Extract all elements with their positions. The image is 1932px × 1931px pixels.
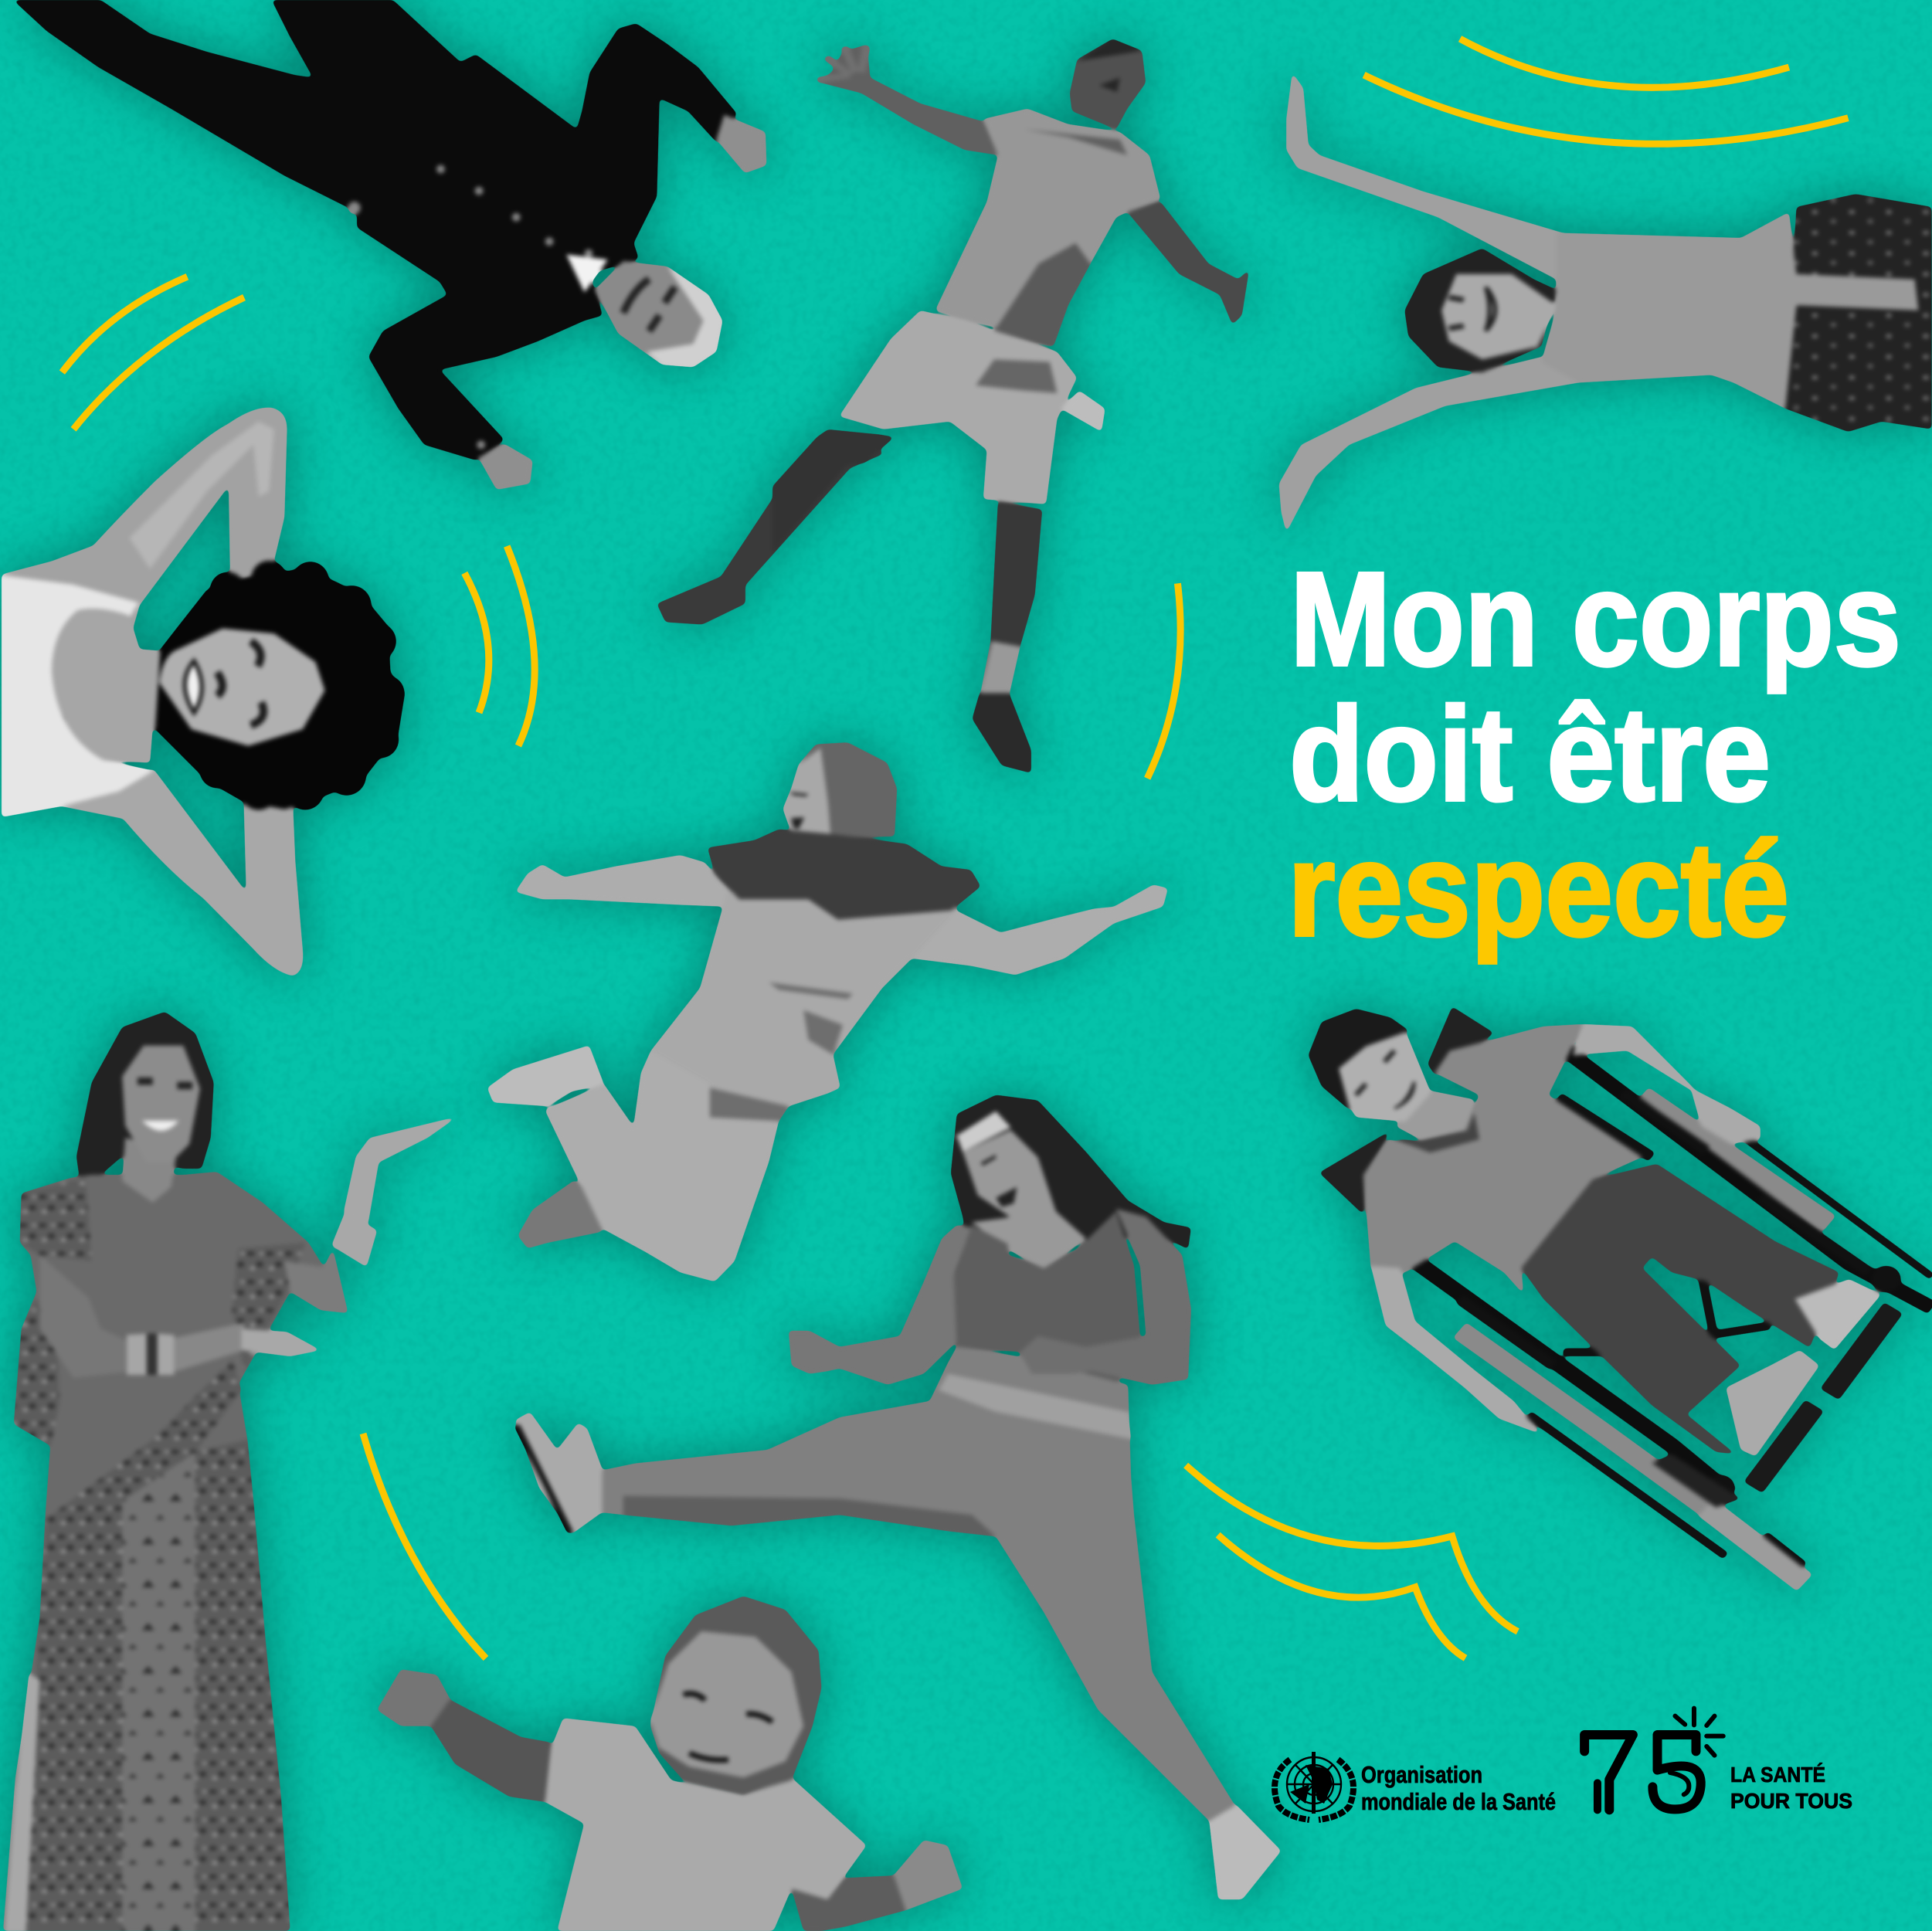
head — [1326, 1031, 1431, 1122]
shorts — [839, 311, 1077, 504]
lower left leg and shoe — [657, 431, 885, 625]
head — [650, 1596, 822, 1794]
hair — [951, 1095, 1191, 1249]
face — [963, 1130, 1056, 1227]
left arm and fist — [789, 1225, 972, 1385]
face features — [1356, 1050, 1394, 1095]
title line 3: respecté — [1288, 814, 1789, 964]
tube handles — [1379, 1026, 1901, 1500]
upper arm — [1286, 73, 1571, 280]
person: girl with polka-dot skirt — [1279, 73, 1932, 533]
headband — [957, 1111, 1011, 1152]
continents — [1290, 1765, 1333, 1804]
face features — [138, 1081, 192, 1085]
raised left arm — [817, 45, 998, 155]
hanging sleeve — [14, 1298, 59, 1446]
upper arm — [2, 407, 287, 672]
right shoe — [1209, 1805, 1282, 1899]
back foot — [518, 1180, 602, 1248]
other arm and hand — [792, 1875, 905, 1931]
undercarriage — [1563, 1272, 1771, 1352]
logo text: WHO name: Organisation — [1361, 1761, 1482, 1788]
logo text: WHO name — [1361, 1761, 1556, 1815]
person: woman in hijab jumping — [487, 742, 1168, 1281]
tunic — [650, 892, 956, 1121]
eyes and mouth — [684, 1694, 772, 1760]
arm highlight — [129, 422, 274, 569]
left shoe — [515, 1412, 603, 1534]
left forearm — [39, 1255, 128, 1378]
person: woman in sari — [3, 1012, 458, 1931]
logo: WHO emblem — [1275, 1752, 1353, 1820]
hair — [76, 1012, 214, 1178]
hijab — [799, 742, 897, 837]
right arm — [1573, 1024, 1761, 1144]
hair — [1404, 248, 1556, 372]
globe — [1287, 1757, 1341, 1811]
title — [1288, 544, 1901, 964]
thigh — [772, 429, 895, 553]
neck and face — [122, 1138, 177, 1203]
sari right panel — [195, 1440, 290, 1931]
leggings — [596, 1347, 1236, 1821]
right arm — [912, 884, 1168, 975]
skirt — [1785, 194, 1932, 432]
fist top — [716, 115, 766, 173]
trousers — [1521, 1164, 1839, 1454]
shirt shadow — [994, 243, 1091, 347]
right sleeve pattern — [233, 1243, 305, 1372]
sari central panel — [122, 1452, 195, 1931]
right arm — [1020, 1209, 1191, 1385]
person: man in black suit — [13, 0, 766, 490]
sari left panel — [19, 1501, 122, 1931]
waistband highlight — [939, 1374, 1131, 1439]
sari dress — [3, 1172, 324, 1931]
leg shadow — [623, 1496, 996, 1536]
shirt — [1363, 1024, 1642, 1295]
mouth and eye — [981, 1155, 1017, 1207]
t-shirt — [935, 109, 1160, 347]
upper hand — [344, 1116, 458, 1224]
person: jumping man in shorts — [657, 39, 1249, 773]
afro hair — [155, 561, 405, 810]
fingers — [817, 46, 867, 80]
logo text: La santé pour tous: LA SANTÉ — [1730, 1763, 1825, 1787]
logo: 75 with sun rays — [1584, 1709, 1723, 1810]
person: woman with afro — [2, 407, 405, 976]
suit buttons and belt — [348, 165, 593, 449]
shirt collar — [566, 254, 608, 292]
front foot — [487, 1045, 604, 1106]
shorts shadow — [976, 359, 1057, 393]
trousers — [545, 1050, 779, 1281]
fist — [377, 1669, 450, 1726]
person: woman in sportswear kicking — [515, 1095, 1282, 1899]
face features — [623, 280, 675, 331]
person: baby — [377, 1596, 963, 1931]
bangles right — [331, 1212, 377, 1268]
pallu stripe — [5, 1674, 39, 1931]
right arm — [1127, 202, 1249, 325]
hand — [894, 1840, 963, 1910]
logo text: La santé pour tous — [1730, 1763, 1852, 1813]
chest — [52, 609, 171, 763]
hair — [1308, 1009, 1409, 1111]
bangles left — [127, 1334, 174, 1375]
title line 2: doit être — [1289, 679, 1771, 829]
scarf — [708, 829, 981, 920]
chair backrest — [1319, 1006, 1494, 1215]
suit — [13, 0, 737, 460]
sari sash band — [46, 1359, 241, 1550]
neck — [1395, 1091, 1475, 1139]
frame tube left — [1390, 1244, 1731, 1494]
decorative yellow motion lines — [62, 39, 1848, 1658]
head — [1070, 39, 1146, 129]
white hair — [647, 266, 722, 367]
frame tube right — [1548, 1037, 1932, 1308]
right leg — [980, 502, 1042, 698]
front caster — [1652, 1454, 1740, 1508]
face — [650, 1631, 803, 1777]
cap and mouth — [1077, 39, 1142, 92]
shoe sole — [517, 1425, 570, 1532]
white tank top — [2, 575, 154, 817]
raised arm and fist — [431, 1699, 551, 1802]
right forearm — [284, 1249, 348, 1313]
sock — [980, 641, 1020, 698]
fist bottom — [478, 444, 533, 490]
face — [1441, 274, 1556, 359]
logo text: WHO name: mondiale de la Santé — [1361, 1788, 1556, 1815]
lower arm — [1279, 357, 1578, 533]
shoe — [972, 693, 1031, 773]
wreath — [1275, 1760, 1353, 1820]
face — [122, 1046, 200, 1162]
tunic folds — [710, 982, 853, 1121]
logo text: La santé pour tous: POUR TOUS — [1730, 1789, 1852, 1813]
collar — [1390, 1113, 1479, 1152]
staff — [1312, 1752, 1316, 1814]
head — [595, 261, 722, 367]
top — [1541, 212, 1918, 409]
neck and chest — [972, 1211, 1086, 1268]
lower hand — [241, 1329, 321, 1356]
left arm — [1371, 1266, 1541, 1434]
rim and wheel left — [1459, 1330, 1706, 1508]
pocket flap — [1061, 391, 1105, 432]
lower arm — [62, 769, 303, 976]
face — [783, 748, 830, 835]
smile and eyes — [1486, 287, 1495, 331]
wrist — [174, 1322, 244, 1372]
shoulder pattern — [20, 1178, 92, 1261]
onesie — [545, 1718, 867, 1931]
left arm — [515, 855, 739, 907]
tank top — [954, 1211, 1140, 1385]
wheel right — [1642, 1095, 1829, 1223]
footrests — [1753, 1308, 1893, 1488]
shoes — [1795, 1279, 1881, 1350]
eye and mouth — [791, 792, 808, 829]
face — [159, 629, 325, 746]
eyes, nose and smile — [217, 641, 263, 725]
person: boy in wheelchair — [1308, 1006, 1932, 1583]
